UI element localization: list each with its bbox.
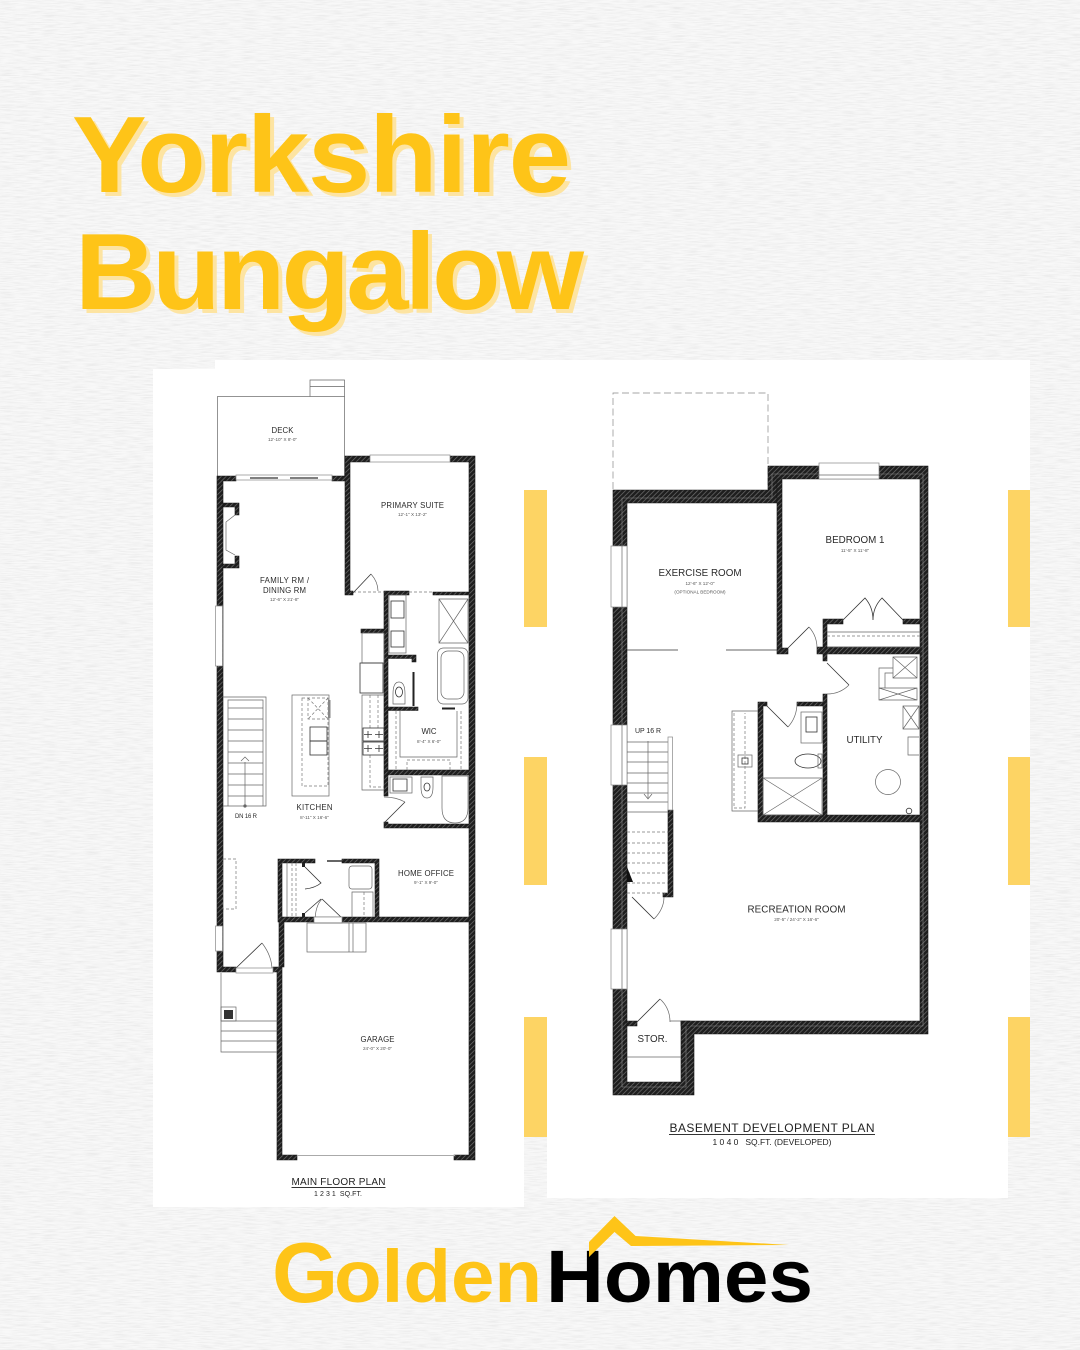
room labels basement: STOR. [638, 1034, 668, 1045]
fireplace [223, 503, 239, 568]
white plan backing panels [153, 360, 1030, 1207]
room labels main floor: WIC [422, 727, 437, 736]
room labels main floor: FAMILY RM / [260, 576, 310, 585]
room labels basement: 11'-5" X 11'-8" [841, 548, 870, 553]
room labels basement [635, 535, 884, 1045]
logo: GoldenHomes: olden [334, 1235, 542, 1318]
title [72, 95, 585, 333]
room labels main floor: 12'-6" X 21'-8" [270, 597, 299, 602]
room labels main floor [235, 426, 454, 1051]
basement doors [632, 598, 903, 1022]
storage shelf line [627, 1056, 681, 1058]
room labels main floor: HOME OFFICE [398, 869, 454, 878]
room labels main floor: 12'-1" X 13'-2" [398, 512, 427, 517]
stairs down [223, 697, 266, 807]
foundation inner lines [622, 474, 923, 1087]
front closet and laundry [223, 859, 373, 952]
room labels basement: UP 16 R [635, 728, 661, 735]
yellow accent stripes [524, 490, 1030, 1137]
main floor plan caption: MAIN FLOOR PLAN [292, 1177, 386, 1188]
room labels basement: 20'-5" / 24'-2" X 16'-6" [774, 917, 819, 922]
room labels main floor: DN 16 R [235, 814, 258, 820]
kitchen counter, fridge and range [360, 633, 384, 790]
title: Yorkshire [72, 95, 571, 216]
room labels main floor: DECK [272, 426, 294, 435]
basement bath fixtures [763, 712, 822, 815]
room labels basement: UTILITY [846, 735, 883, 746]
room labels main floor: 24'-0" X 20'-0" [363, 1046, 392, 1051]
basement development plan [611, 393, 928, 1147]
room labels basement: (OPTIONAL BEDROOM) [674, 590, 726, 594]
logo: GoldenHomes: G [272, 1226, 338, 1321]
main floor plan caption [292, 1177, 386, 1198]
deck and rear steps [218, 380, 344, 476]
walk-in closet shelves [396, 711, 461, 770]
basement stairs [627, 737, 672, 893]
wet bar [732, 711, 758, 811]
room labels main floor: KITCHEN [296, 803, 332, 812]
basement windows [611, 463, 879, 989]
room labels main floor: 8'-11" X 16'-6" [300, 815, 329, 820]
main floor plan caption: 1 2 3 1 SQ.FT. [314, 1191, 362, 1198]
utility equipment [876, 657, 919, 814]
foundation walls [613, 466, 928, 1095]
title: Bungalow [75, 212, 585, 333]
basement plan caption: BASEMENT DEVELOPMENT PLAN [670, 1121, 874, 1135]
room labels basement: EXERCISE ROOM [658, 568, 742, 579]
basement plan caption: 1 0 4 0 SQ.FT. (DEVELOPED) [712, 1137, 832, 1147]
logo roof [589, 1216, 789, 1257]
room labels main floor: DINING RM [263, 586, 306, 595]
main bath fixtures [390, 776, 468, 823]
logo: GoldenHomes: Homes [546, 1235, 813, 1318]
exercise room partition lines [627, 649, 777, 651]
room labels main floor: 8'-4" X 6'-0" [417, 739, 441, 744]
basement plan caption [669, 1121, 875, 1147]
interior doors [236, 574, 405, 973]
room labels basement: RECREATION ROOM [748, 904, 846, 916]
main floor plan [216, 380, 475, 1198]
room labels basement: BEDROOM 1 [826, 535, 884, 546]
main floor windows and sliding door [216, 455, 455, 1156]
room labels main floor: 12'-10" X 8'-0" [268, 437, 297, 442]
kitchen island [292, 695, 330, 796]
basement interior walls [627, 479, 920, 1026]
covered deck outline above [613, 393, 768, 489]
logo: GoldenHomes [272, 1216, 813, 1321]
bedroom closet [827, 632, 920, 647]
room labels main floor: 9'-1" X 9'-0" [414, 880, 438, 885]
main floor walls [217, 456, 475, 1160]
primary bath fixtures [353, 592, 468, 708]
front porch and steps [221, 973, 277, 1052]
room labels main floor: GARAGE [360, 1035, 394, 1044]
room labels main floor: PRIMARY SUITE [381, 501, 444, 510]
room labels basement: 12'-6" X 12'-0" [685, 581, 715, 586]
